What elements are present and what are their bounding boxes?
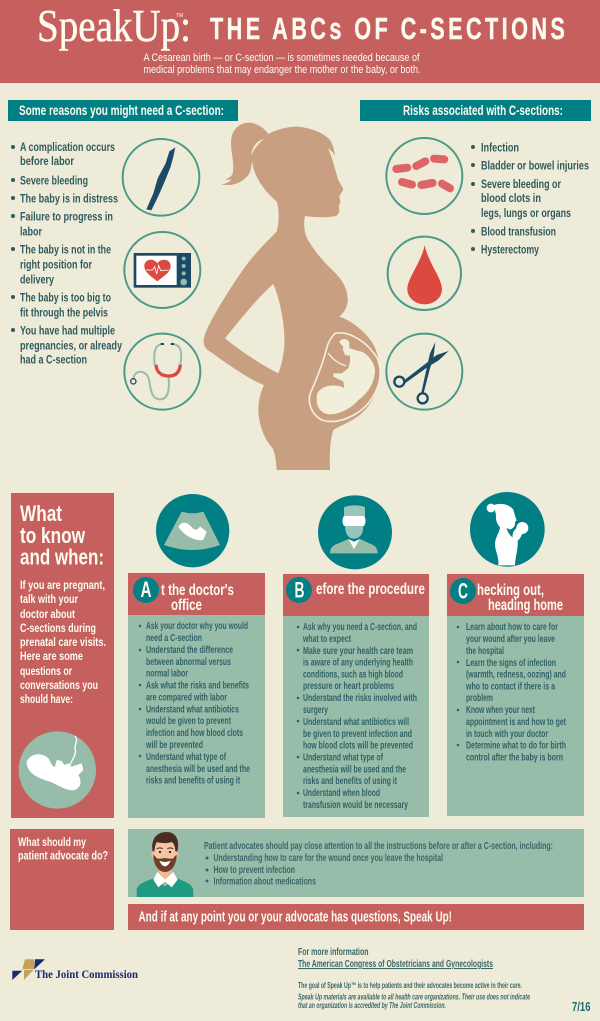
bullet list B: Understand what antibiotics will [303, 716, 409, 728]
bullet list B: what to expect [302, 633, 351, 645]
heading: What [20, 501, 63, 526]
list: reasons: A complication occurs [20, 140, 115, 154]
panel heading [161, 582, 234, 614]
bullet list C: the hospital [466, 645, 504, 657]
bullet list A: will be prevented [145, 739, 203, 751]
list: reasons: Severe bleeding [20, 174, 88, 188]
bullet list A: need a C-section [146, 632, 202, 644]
illustration: pregnant silhouette with icons [123, 123, 462, 470]
bullet list B: surgery [303, 704, 328, 716]
heading: risks [360, 100, 591, 121]
list: risks: Infection [481, 140, 519, 154]
panel heading: efore the procedure [316, 581, 425, 598]
list: reasons: The baby is in distress [20, 192, 118, 206]
icon: mother and baby [470, 492, 545, 567]
title: THE ABCs OF C-SECTIONS [210, 11, 565, 46]
bullet list B: Understand the risks involved with [303, 692, 417, 704]
bullet list B: conditions, such as high blood [303, 668, 403, 680]
icon: fetus [19, 731, 96, 809]
list: reasons: fit through the pelvis [20, 306, 108, 320]
letter badge B [286, 577, 312, 603]
fetus in womb [309, 333, 380, 421]
bullet list B: pressure or heart problems [303, 680, 394, 692]
bullet list B: Make sure your health care team [303, 645, 413, 657]
bullet list A: risks and benefits of using it [146, 774, 240, 786]
logo: The Joint Commission [12, 959, 139, 981]
letter badge B: B [294, 578, 304, 602]
text block: C-sections during [20, 621, 96, 635]
list: reasons: right position for [20, 258, 92, 272]
advocate text: Understanding how to care for the wound once you leave the hospital [214, 852, 443, 864]
letter badge C [450, 578, 476, 604]
bullet list A: Ask what the risks and benefits [146, 680, 249, 692]
icon: stethoscope [124, 334, 200, 410]
list: reasons [11, 140, 122, 366]
list: reasons: pregnancies, or already [20, 338, 122, 352]
bullet list A: anesthesia will be used and the [146, 763, 250, 775]
bullet list C: your wound after you leave [466, 633, 555, 645]
list: reasons: before labor [20, 154, 74, 168]
panel: what to know and when [11, 493, 114, 818]
callout: speak up bar: And if at any point you or your advocate has questions, Speak Up! [138, 908, 452, 926]
logo: The Joint Commission: The Joint Commission [35, 969, 139, 981]
bullet list A: Understand the difference [146, 644, 233, 656]
icon: scalpel [123, 139, 199, 216]
bullet list B: Ask why you need a C-section, and [303, 621, 417, 633]
bullet list A: Ask your doctor why you would [146, 620, 248, 632]
panel: what should my patient advocate do [10, 829, 114, 930]
panel heading: office [171, 597, 202, 614]
bullet list A: normal labor [146, 668, 188, 680]
bullet list A [139, 620, 250, 786]
bullet list C: Know when your next [466, 704, 535, 716]
text block: Here are some [20, 649, 83, 663]
list: reasons: had a C-section [20, 352, 87, 366]
date code: 7/16 [572, 1000, 591, 1014]
list: risks: blood clots in [481, 191, 541, 205]
heading [20, 501, 104, 570]
list: risks [471, 140, 589, 256]
bullet list A: Understand what antibiotics [146, 704, 239, 716]
disclaimer text [298, 981, 530, 1010]
list: risks: Severe bleeding or [481, 177, 561, 191]
advocate text: Information about medications [214, 876, 316, 888]
callout: speak up bar [128, 904, 584, 930]
bullet list A: infection and how blood clots [146, 727, 243, 739]
intro text [144, 52, 420, 76]
silhouette [204, 123, 380, 470]
disclaimer text: that an organization is accredited by The Joint Commission. [298, 1001, 446, 1010]
text block: doctor about [20, 607, 75, 621]
list: risks: legs, lungs or organs [481, 206, 571, 220]
bullet list B: transfusion would be necessary [303, 799, 408, 811]
panel heading: t the doctor's [161, 582, 234, 599]
list: reasons: The baby is too big to [20, 290, 111, 304]
bullet list A: are compared with labor [146, 692, 227, 704]
heading: reasons: Some reasons you might need a C-section: [19, 102, 224, 118]
intro text: medical problems that may endanger the mother or the baby, or both. [144, 64, 420, 76]
icon: ultrasound [156, 494, 229, 567]
heading: reasons [8, 100, 238, 121]
header banner [0, 0, 600, 83]
list: risks: Hysterectomy [481, 242, 539, 256]
panel heading: hecking out, [477, 582, 544, 599]
panel: B before the procedure [283, 574, 429, 817]
panel: C checking out, heading home [447, 574, 584, 816]
bullet list B: Understand when blood [303, 787, 380, 799]
panel: what should my patient advocate do: What should my [18, 835, 86, 849]
text block: talk with your [20, 592, 78, 606]
text block: If you are pregnant, [20, 578, 105, 592]
bullet list B: anesthesia will be used and the [303, 764, 406, 776]
more information [298, 946, 493, 970]
more information: The American Congress of Obstetricians and Gynecologists [298, 958, 493, 970]
advocate text [204, 840, 553, 888]
bullet list C: who to contact if there is a [465, 680, 555, 692]
bullet list B [297, 621, 417, 811]
list: reasons: The baby is not in the [20, 242, 111, 256]
list: reasons: labor [20, 224, 42, 238]
panel: A at the doctor's office [128, 573, 265, 818]
panel: what should my patient advocate do: patient advocate do? [18, 848, 108, 862]
text block: questions or [20, 664, 72, 678]
icon: blood drop [388, 237, 461, 310]
list: reasons: Failure to progress in [20, 210, 113, 224]
bullet list B: how blood clots will be prevented [303, 740, 413, 752]
heading: to know [20, 523, 86, 548]
more information: For more information [298, 946, 368, 958]
list: reasons: You have had multiple [20, 324, 115, 338]
intro text: A Cesarean birth — or C-section — is sometimes needed because of [144, 52, 420, 64]
text block: should have: [20, 692, 73, 706]
icon: bacteria [386, 138, 462, 214]
bullet list B: be given to prevent infection and [303, 728, 412, 740]
advocate text: How to prevent infection [214, 864, 295, 876]
letter badge C: C [458, 578, 468, 604]
bullet list C [457, 621, 566, 764]
text block [20, 578, 106, 706]
bullet list A: Understand what type of [146, 751, 226, 763]
bullet list B: Understand what type of [303, 752, 383, 764]
icon: surgeon [318, 495, 392, 569]
icon: man portrait [137, 832, 193, 897]
bullet list C: in touch with your doctor [466, 728, 548, 740]
icon: heart monitor [124, 232, 200, 308]
bullet list C: Learn the signs of infection [466, 657, 556, 669]
panel: patient advocate instructions [128, 829, 584, 897]
heading: and when: [20, 544, 104, 570]
panel heading [477, 582, 563, 614]
bullet list B: is aware of any underlying health [303, 656, 413, 668]
letter badge A: A [140, 577, 152, 602]
bullet list A: between abnormal versus [146, 656, 231, 668]
list: reasons: delivery [20, 272, 54, 286]
text block: conversations you [20, 678, 98, 692]
text block: prenatal care visits. [20, 635, 106, 649]
logo wordmark: SpeakUp: TM [176, 13, 183, 19]
letter badge A [133, 577, 159, 603]
icon: scissors [386, 334, 462, 410]
bullet list B: risks and benefits of using it [303, 775, 397, 787]
logo wordmark: SpeakUp: SpeakUp: [37, 0, 191, 51]
bullet list C: problem [466, 692, 493, 704]
panel heading: heading home [488, 597, 563, 614]
bullet list A: would be given to prevent [145, 715, 231, 727]
list: risks: Blood transfusion [481, 224, 556, 238]
